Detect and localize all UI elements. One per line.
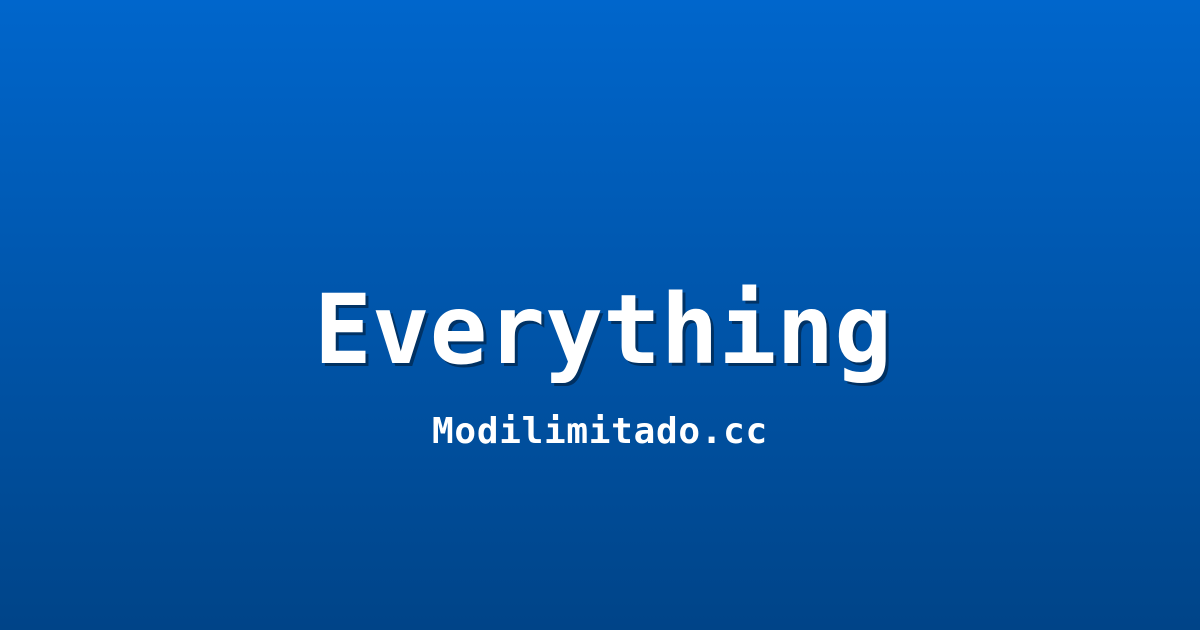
title: Everything: [314, 274, 892, 386]
subtitle: site name: Modilimitado.cc: [432, 411, 768, 452]
